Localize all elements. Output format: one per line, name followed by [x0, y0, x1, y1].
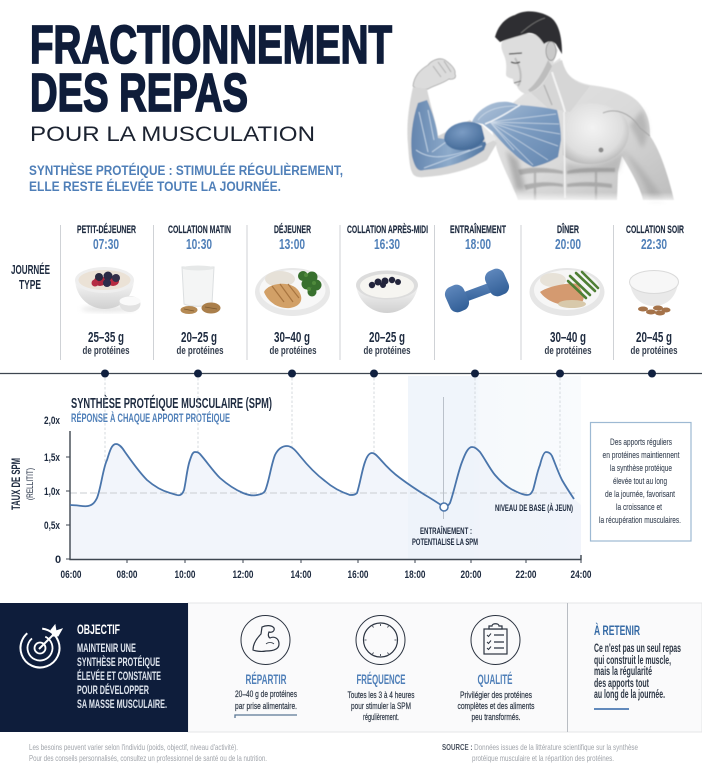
icon: plate with chicken, rice and broccoli — [255, 268, 330, 316]
panel: à retenir: À RETENIR — [594, 623, 640, 638]
footnote: source: protéique musculaire et la répartition des protéines. — [472, 753, 614, 763]
panel: à retenir — [594, 623, 681, 709]
label: journée type: JOURNÉE — [11, 262, 50, 277]
meal: petit-déjeuner: de protéines — [82, 345, 130, 357]
panel: à retenir: mais la régularité — [594, 666, 652, 678]
divider — [566, 603, 568, 732]
annotation: training — [412, 525, 478, 548]
icon: clock — [356, 616, 405, 664]
title: FRACTIONNEMENT — [30, 15, 392, 75]
footnote: source — [442, 742, 638, 763]
meal: collation matin: 10:30 — [186, 236, 212, 253]
panel: qualité: complètes et des aliments — [458, 701, 535, 712]
x axis labels: 10:00 — [174, 569, 196, 581]
label: journée type — [11, 262, 50, 292]
shoulder and arm shading — [506, 110, 664, 200]
footnote: source: SOURCE : Données issues de la littérature scientifique sur la synthèse — [442, 742, 638, 752]
title: DES REPAS — [30, 63, 248, 123]
panel: fréquence: régulièrement. — [363, 712, 399, 723]
x axis labels: 06:00 — [60, 569, 82, 581]
meal: déjeuner: de protéines — [270, 345, 316, 357]
meal: petit-déjeuner — [75, 223, 140, 357]
face — [501, 32, 558, 94]
neck — [530, 60, 590, 112]
callout: regular protein intake: élevée tout au long — [613, 476, 667, 486]
meal: collation matin: 20–25 g — [181, 330, 217, 346]
panel: fréquence — [348, 616, 415, 723]
y axis labels: 0 — [55, 554, 61, 566]
callout: regular protein intake: Des apports réguliers — [610, 437, 672, 447]
panel: fréquence: pour stimuler la SPM — [351, 701, 411, 712]
meal: collation soir: 22:30 — [641, 236, 667, 253]
meal: dîner: 20:00 — [555, 236, 581, 253]
y axis title: TAUX DE SPM — [11, 458, 23, 510]
panel: objectif: POUR DÉVELOPPER — [77, 684, 149, 697]
icon: checklist clipboard — [471, 616, 520, 664]
panel: objectif: MAINTENIR UNE — [77, 643, 136, 655]
callout: regular protein intake: de la journée, favorisant — [605, 489, 675, 499]
meal: petit-déjeuner: 07:30 — [93, 236, 119, 253]
y axis labels: 0,5x — [44, 520, 61, 532]
panel: qualité — [458, 616, 535, 723]
footnote: disclaimer: Pour des conseils personnalisés, consultez un professionnel de santé ou de la nutrition. — [29, 753, 267, 763]
panel: objectif: ÉLEVÉE ET CONSTANTE — [77, 670, 161, 683]
meal: collation matin: de protéines — [176, 345, 224, 357]
footnote: disclaimer — [29, 742, 267, 763]
tagline — [29, 163, 343, 194]
hair — [495, 11, 562, 54]
annotation: baseline: NIVEAU DE BASE (À JEUN) — [495, 503, 573, 514]
icon: flexed arm — [241, 616, 290, 664]
meal: déjeuner: 13:00 — [279, 236, 305, 253]
y axis title — [11, 458, 36, 510]
icon: blue dumbbell — [442, 266, 512, 315]
meal: petit-déjeuner: 25–35 g — [88, 330, 124, 346]
meal: collation soir: de protéines — [630, 345, 678, 357]
column separators — [60, 225, 614, 360]
icon: plate with salmon, rice and green beans — [530, 268, 604, 316]
meal schedule row — [11, 223, 684, 360]
bottom fade — [500, 170, 680, 202]
icon: glass of milk and nuts — [180, 266, 220, 314]
curve — [70, 444, 574, 507]
blue forearm muscles — [411, 100, 487, 170]
tagline: ELLE RESTE ÉLEVÉE TOUTE LA JOURNÉE. — [29, 179, 281, 194]
panel: fréquence: Toutes les 3 à 4 heures — [348, 690, 415, 701]
x axis labels: 12:00 — [232, 569, 254, 581]
y axis labels: 1,0x — [44, 486, 61, 498]
panel: qualité: peu transformés. — [472, 712, 520, 723]
meal: petit-déjeuner: PETIT-DÉJEUNER — [77, 223, 136, 236]
icon: bowl of cottage cheese with blueberries — [356, 270, 418, 313]
baseline dashed — [70, 492, 575, 494]
meal: collation soir — [626, 224, 684, 357]
y axis labels: 1,5x — [44, 452, 61, 464]
chart: muscle protein synthesis — [11, 378, 592, 581]
meal: dîner: 30–40 g — [550, 330, 586, 346]
training highlight band — [408, 376, 581, 559]
panel: à retenir: des apports tout — [594, 678, 649, 690]
callout: regular protein intake: la synthèse protéique — [610, 463, 672, 473]
eye and brow — [509, 53, 522, 63]
x axis labels: 14:00 — [290, 569, 312, 581]
panel: répartir: par prise alimentaire. — [235, 701, 297, 712]
callout: regular protein intake — [590, 422, 691, 541]
arm underlay — [407, 87, 497, 177]
annotation: training: POTENTIALISE LA SPM — [412, 537, 478, 548]
x axis labels: 16:00 — [348, 569, 368, 581]
label: journée type: TYPE — [19, 278, 41, 292]
panel: benefits background — [188, 603, 702, 732]
panel: objectif: SA MASSE MUSCULAIRE. — [77, 699, 167, 711]
fist — [413, 59, 456, 89]
abs — [518, 168, 615, 200]
meal: entraînement: 18:00 — [465, 236, 491, 253]
footnote: disclaimer: Les besoins peuvent varier selon l'individu (poids, objectif, niveau d'activité). — [29, 742, 238, 752]
meal: collation après-midi: 16:30 — [374, 236, 400, 253]
blue pectoral and deltoid — [472, 102, 561, 167]
x axis labels: 22:00 — [516, 569, 536, 581]
panel: fréquence: FRÉQUENCE — [356, 672, 406, 687]
meal: collation après-midi: COLLATION APRÈS-MIDI — [347, 223, 428, 236]
panel: qualité: QUALITÉ — [478, 672, 512, 687]
panel: objectif: OBJECTIF — [77, 622, 120, 637]
title — [30, 15, 392, 123]
training marker line — [442, 397, 444, 519]
right pec — [563, 103, 629, 164]
meal: collation après-midi — [347, 223, 428, 357]
torso — [490, 58, 674, 200]
meal: entraînement: ENTRAÎNEMENT — [450, 223, 506, 236]
panel: objectif — [0, 603, 188, 732]
annotation: training: ENTRAÎNEMENT : — [420, 525, 472, 537]
chart subtitle: RÉPONSE À CHAQUE APPORT PROTÉIQUE — [71, 412, 230, 425]
meal: collation matin — [168, 224, 231, 357]
icon: yogurt bowl with almonds — [630, 270, 678, 316]
meal: collation après-midi: 20–25 g — [369, 330, 405, 346]
tagline: SYNTHÈSE PROTÉIQUE : STIMULÉE RÉGULIÈREMENT, — [29, 163, 343, 178]
x axis labels: 24:00 — [570, 569, 592, 581]
meal: collation matin: COLLATION MATIN — [168, 224, 231, 236]
panel: répartir: RÉPARTIR — [246, 672, 287, 687]
meal: dîner — [530, 223, 604, 357]
icon: target with arrow — [14, 622, 66, 674]
x axis labels: 18:00 — [404, 569, 426, 581]
meal: déjeuner: DÉJEUNER — [274, 223, 311, 236]
x axis labels — [60, 569, 592, 581]
chart title: SYNTHÈSE PROTÉIQUE MUSCULAIRE (SPM) — [71, 395, 272, 412]
icon: oatmeal bowl with berries — [75, 267, 140, 312]
meal: entraînement — [442, 223, 512, 315]
illustration: muscular man flexing with highlighted blue muscles — [407, 11, 680, 202]
meal: dîner: de protéines — [544, 345, 592, 357]
ear — [546, 42, 556, 60]
panel: répartir: 20–40 g de protéines — [235, 689, 297, 700]
meal drop lines — [105, 378, 560, 472]
nipples — [524, 152, 528, 158]
area under curve — [70, 444, 581, 559]
meal: collation soir: 20–45 g — [636, 330, 672, 346]
meal: dîner: DÎNER — [557, 223, 579, 236]
biceps — [442, 119, 488, 153]
subtitle: POUR LA MUSCULATION — [30, 122, 315, 146]
y axis labels: 2,0x — [44, 415, 61, 427]
panel: qualité: Privilégier des protéines — [460, 690, 532, 701]
timeline with meal markers — [0, 370, 702, 378]
training point marker — [440, 503, 448, 511]
meal: déjeuner — [255, 223, 330, 357]
meal: déjeuner: 30–40 g — [274, 330, 310, 346]
axes — [66, 431, 581, 563]
x axis labels: 20:00 — [460, 569, 482, 581]
panel: répartir — [235, 616, 297, 718]
y axis title: (RELLITIT) — [25, 468, 36, 500]
y axis labels — [44, 415, 61, 566]
meal: collation après-midi: de protéines — [364, 345, 410, 357]
callout: regular protein intake: la croissance et — [616, 502, 662, 512]
panel: objectif: SYNTHÈSE PROTÉIQUE — [77, 656, 160, 669]
x axis labels: 08:00 — [116, 569, 138, 581]
